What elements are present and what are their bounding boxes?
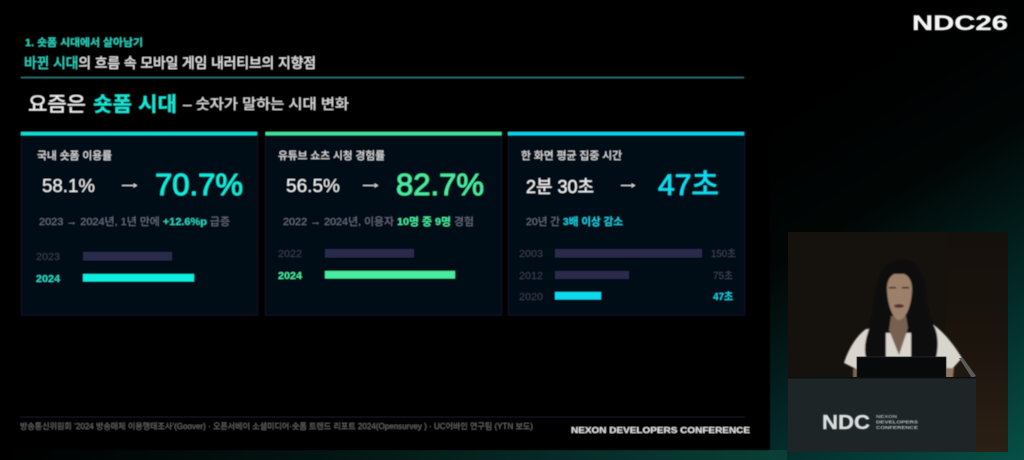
bar chart [519,248,736,303]
stat before: 2분 30초 [526,177,594,197]
slide panel [0,0,770,450]
main heading: 요즘은 [28,94,86,116]
bar chart: 2012 [519,270,543,282]
speaker figure [844,260,962,378]
bar chart: 2024 [36,273,60,285]
sources: 방송통신위원회 ‘2024 방송매체 이용행태조사’(Goover) · 오픈서베이 소셜미디어·숏폼 트렌드 리포트 2024(Opensurvey ) · UC어바인 연구팀 (YTN 보도) [20,421,533,431]
speaker video [788,232,1008,452]
bar chart: 150초 [711,248,736,260]
arrow [621,184,634,187]
stat after: 47초 [658,169,719,202]
laptop [857,357,946,378]
card title: 국내 숏폼 이용률 [37,150,112,162]
description: 2023 → 2024년, 1년 만에 +12.6%p 급증 [39,216,230,228]
podium logo: CONFERENCE [876,425,918,430]
section label: 1. 숏폼 시대에서 살아남기 [25,36,143,49]
main heading [28,93,349,116]
podium logo: DEVELOPERS [876,420,918,424]
panel: youtube shorts [266,132,502,315]
stat before: 58.1% [42,176,95,196]
subtitle: 바뀐 시대의 흐름 속 모바일 게임 내러티브의 지향점 [24,55,316,71]
conference name: NEXON DEVELOPERS CONFERENCE [571,426,751,435]
description: 2022 → 2024년, 이용자 10명 중 9명 경험 [283,215,474,228]
podium logo: NEXON [876,414,897,419]
arrow [363,184,378,187]
bar chart [278,248,455,282]
bar chart [36,251,194,285]
main heading: 숏폼 시대 [93,93,177,116]
description: 20년 간 3배 이상 감소 [526,215,623,228]
main heading: – 숫자가 말하는 시대 변화 [183,96,349,112]
stat after: 82.7% [396,167,484,202]
stat before: 56.5% [286,176,340,196]
stat after: 70.7% [155,167,243,202]
card title: 한 화면 평균 집중 시간 [521,150,622,162]
bar chart: 47초 [713,291,733,303]
bar chart: 2003 [519,248,543,260]
footer [20,416,751,435]
bar chart: 2022 [278,248,302,260]
podium logo [822,412,918,434]
bar chart: 2020 [519,291,543,303]
card title: 유튜브 쇼츠 시청 경험률 [278,149,385,162]
bar chart: 75초 [713,270,733,282]
bar chart: 2023 [36,251,60,263]
panel: short-form usage [21,132,258,315]
bar chart: 2024 [278,270,302,282]
podium [788,378,976,452]
panel: attention span [508,132,744,315]
logo: NDC26: NDC26 [912,12,1008,35]
podium logo: NDC [822,412,870,434]
arrow [122,184,136,187]
